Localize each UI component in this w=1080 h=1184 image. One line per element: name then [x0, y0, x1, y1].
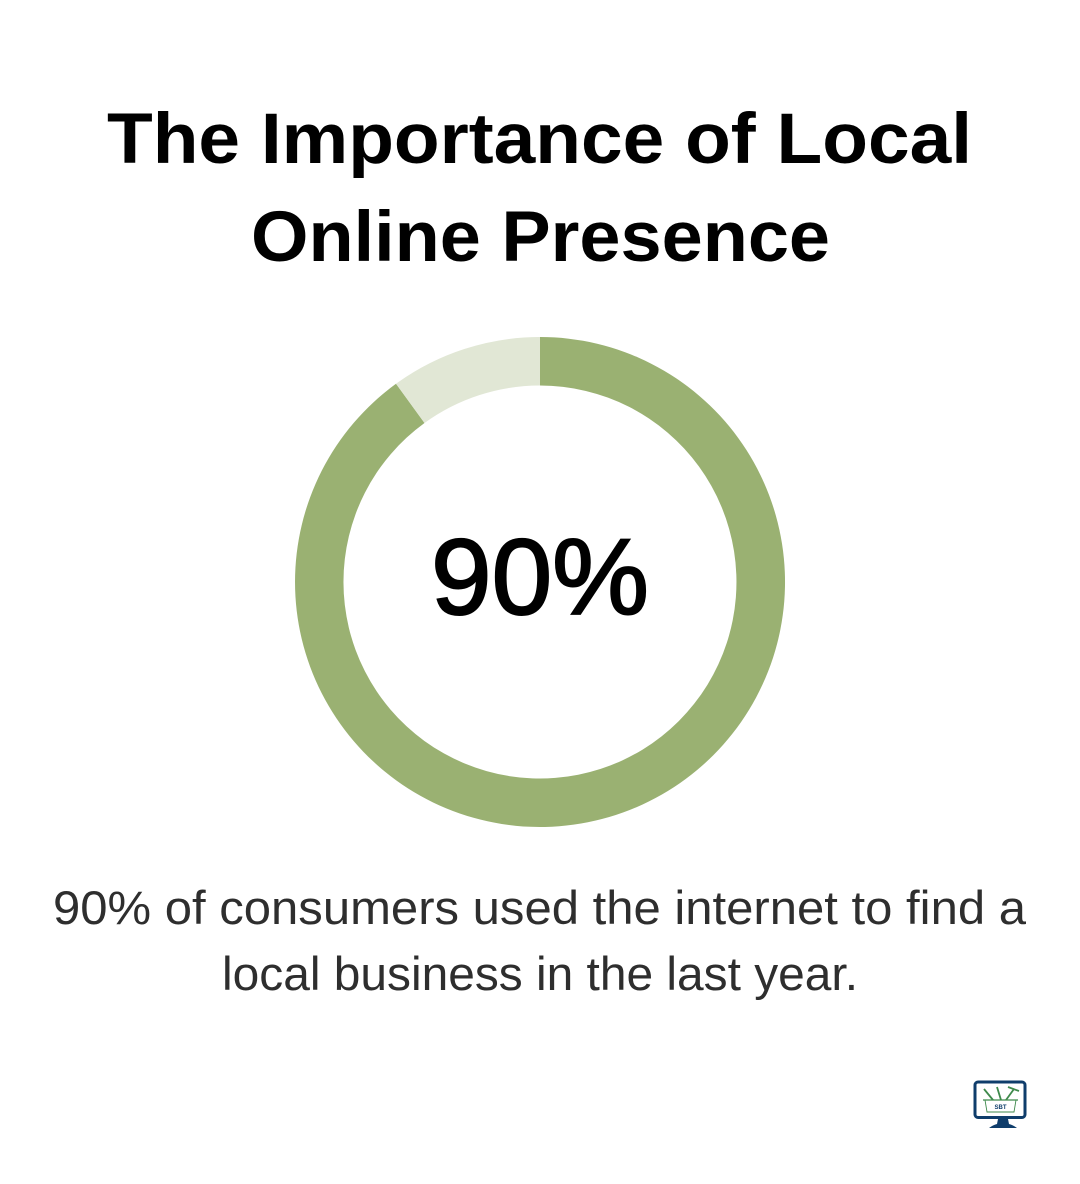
title: The Importance of Local	[107, 100, 972, 179]
description text: 90% of consumers used the internet to find a	[53, 881, 1027, 934]
title	[107, 100, 972, 277]
description text: local business in the last year.	[222, 947, 858, 1000]
donut segment: remaining 10 percent	[396, 337, 540, 423]
donut chart: 90 percent	[295, 337, 785, 827]
description text	[53, 881, 1027, 1000]
icon: monitor logo with toolbox: SBT	[994, 1105, 1007, 1111]
donut value: 90%	[431, 516, 649, 637]
title: Online Presence	[251, 198, 830, 277]
donut segment: 90 percent	[295, 337, 785, 827]
icon: monitor logo with toolbox	[975, 1082, 1025, 1128]
